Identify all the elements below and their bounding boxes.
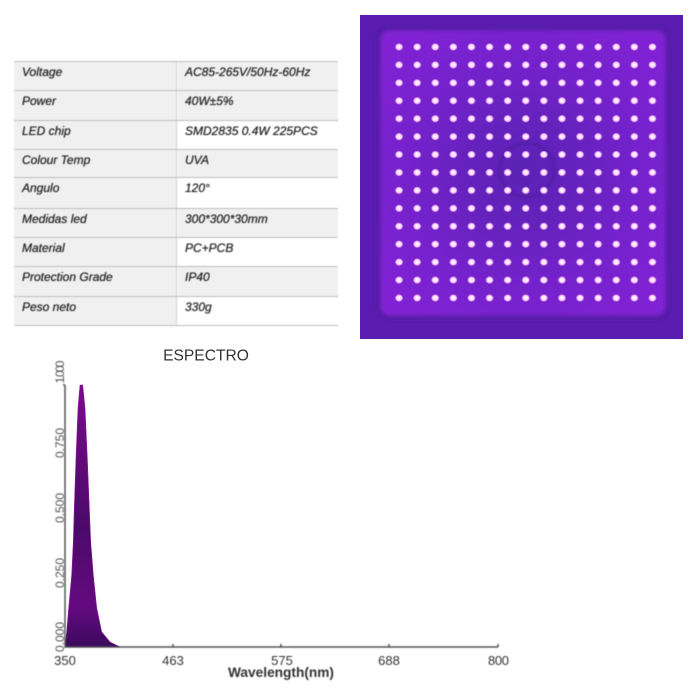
- x axis title: Wavelength(nm): [228, 665, 334, 680]
- row: medidas led: [14, 208, 338, 237]
- x axis labels: 350: [54, 653, 76, 668]
- x axis labels: 575: [271, 653, 293, 668]
- row: angulo: 120°: [185, 181, 210, 195]
- chart title: ESPECTRO: [163, 348, 249, 364]
- table: specifications: [14, 60, 338, 326]
- row: LED chip: SMD2835 0.4W 225PCS: [185, 124, 318, 138]
- row: colour temp: [14, 149, 338, 177]
- y axis labels: 0.750: [53, 428, 67, 458]
- centre ring marking: [500, 143, 554, 197]
- row: power: [14, 90, 338, 120]
- row: power: Power: [22, 94, 56, 108]
- row: peso neto: Peso neto: [22, 300, 76, 314]
- row: LED chip: [14, 120, 338, 149]
- row: medidas led: Medidas led: [22, 212, 87, 226]
- photo: UVA LED panel: [360, 15, 683, 339]
- row: angulo: Angulo: [22, 181, 59, 195]
- axes: [63, 385, 498, 647]
- row: protection grade: IP40: [185, 270, 210, 284]
- LED grid: 15 by 15: [390, 38, 662, 307]
- spectrum curve: [65, 385, 120, 647]
- row: angulo: [14, 177, 338, 208]
- row: material: Material: [22, 241, 65, 255]
- row: peso neto: 330g: [185, 300, 212, 314]
- row: power: 40W±5%: [185, 94, 234, 108]
- row: medidas led: 300*300*30mm: [185, 212, 268, 226]
- x axis labels: [54, 653, 509, 668]
- row: voltage: AC85-265V/50Hz-60Hz: [185, 65, 310, 79]
- y axis labels: 0.500: [53, 493, 67, 523]
- row: protection grade: [14, 266, 338, 296]
- x axis labels: 463: [162, 653, 184, 668]
- row: voltage: Voltage: [22, 65, 62, 79]
- y axis labels: 1.000: [53, 360, 67, 384]
- y axis labels: [53, 360, 67, 652]
- y axis labels: 0.250: [53, 558, 67, 588]
- row: LED chip: LED chip: [22, 124, 71, 138]
- row: material: [14, 237, 338, 266]
- row: voltage: [14, 61, 338, 90]
- row: protection grade: Protection Grade: [22, 270, 113, 284]
- x axis labels: 800: [488, 653, 509, 668]
- row: colour temp: Colour Temp: [22, 153, 90, 167]
- row: peso neto: [14, 296, 338, 326]
- x axis labels: 688: [378, 653, 400, 668]
- row: material: PC+PCB: [185, 241, 233, 255]
- row: colour temp: UVA: [185, 153, 209, 167]
- y axis labels: 0.000: [53, 622, 67, 652]
- chart: spectrum: [53, 348, 509, 680]
